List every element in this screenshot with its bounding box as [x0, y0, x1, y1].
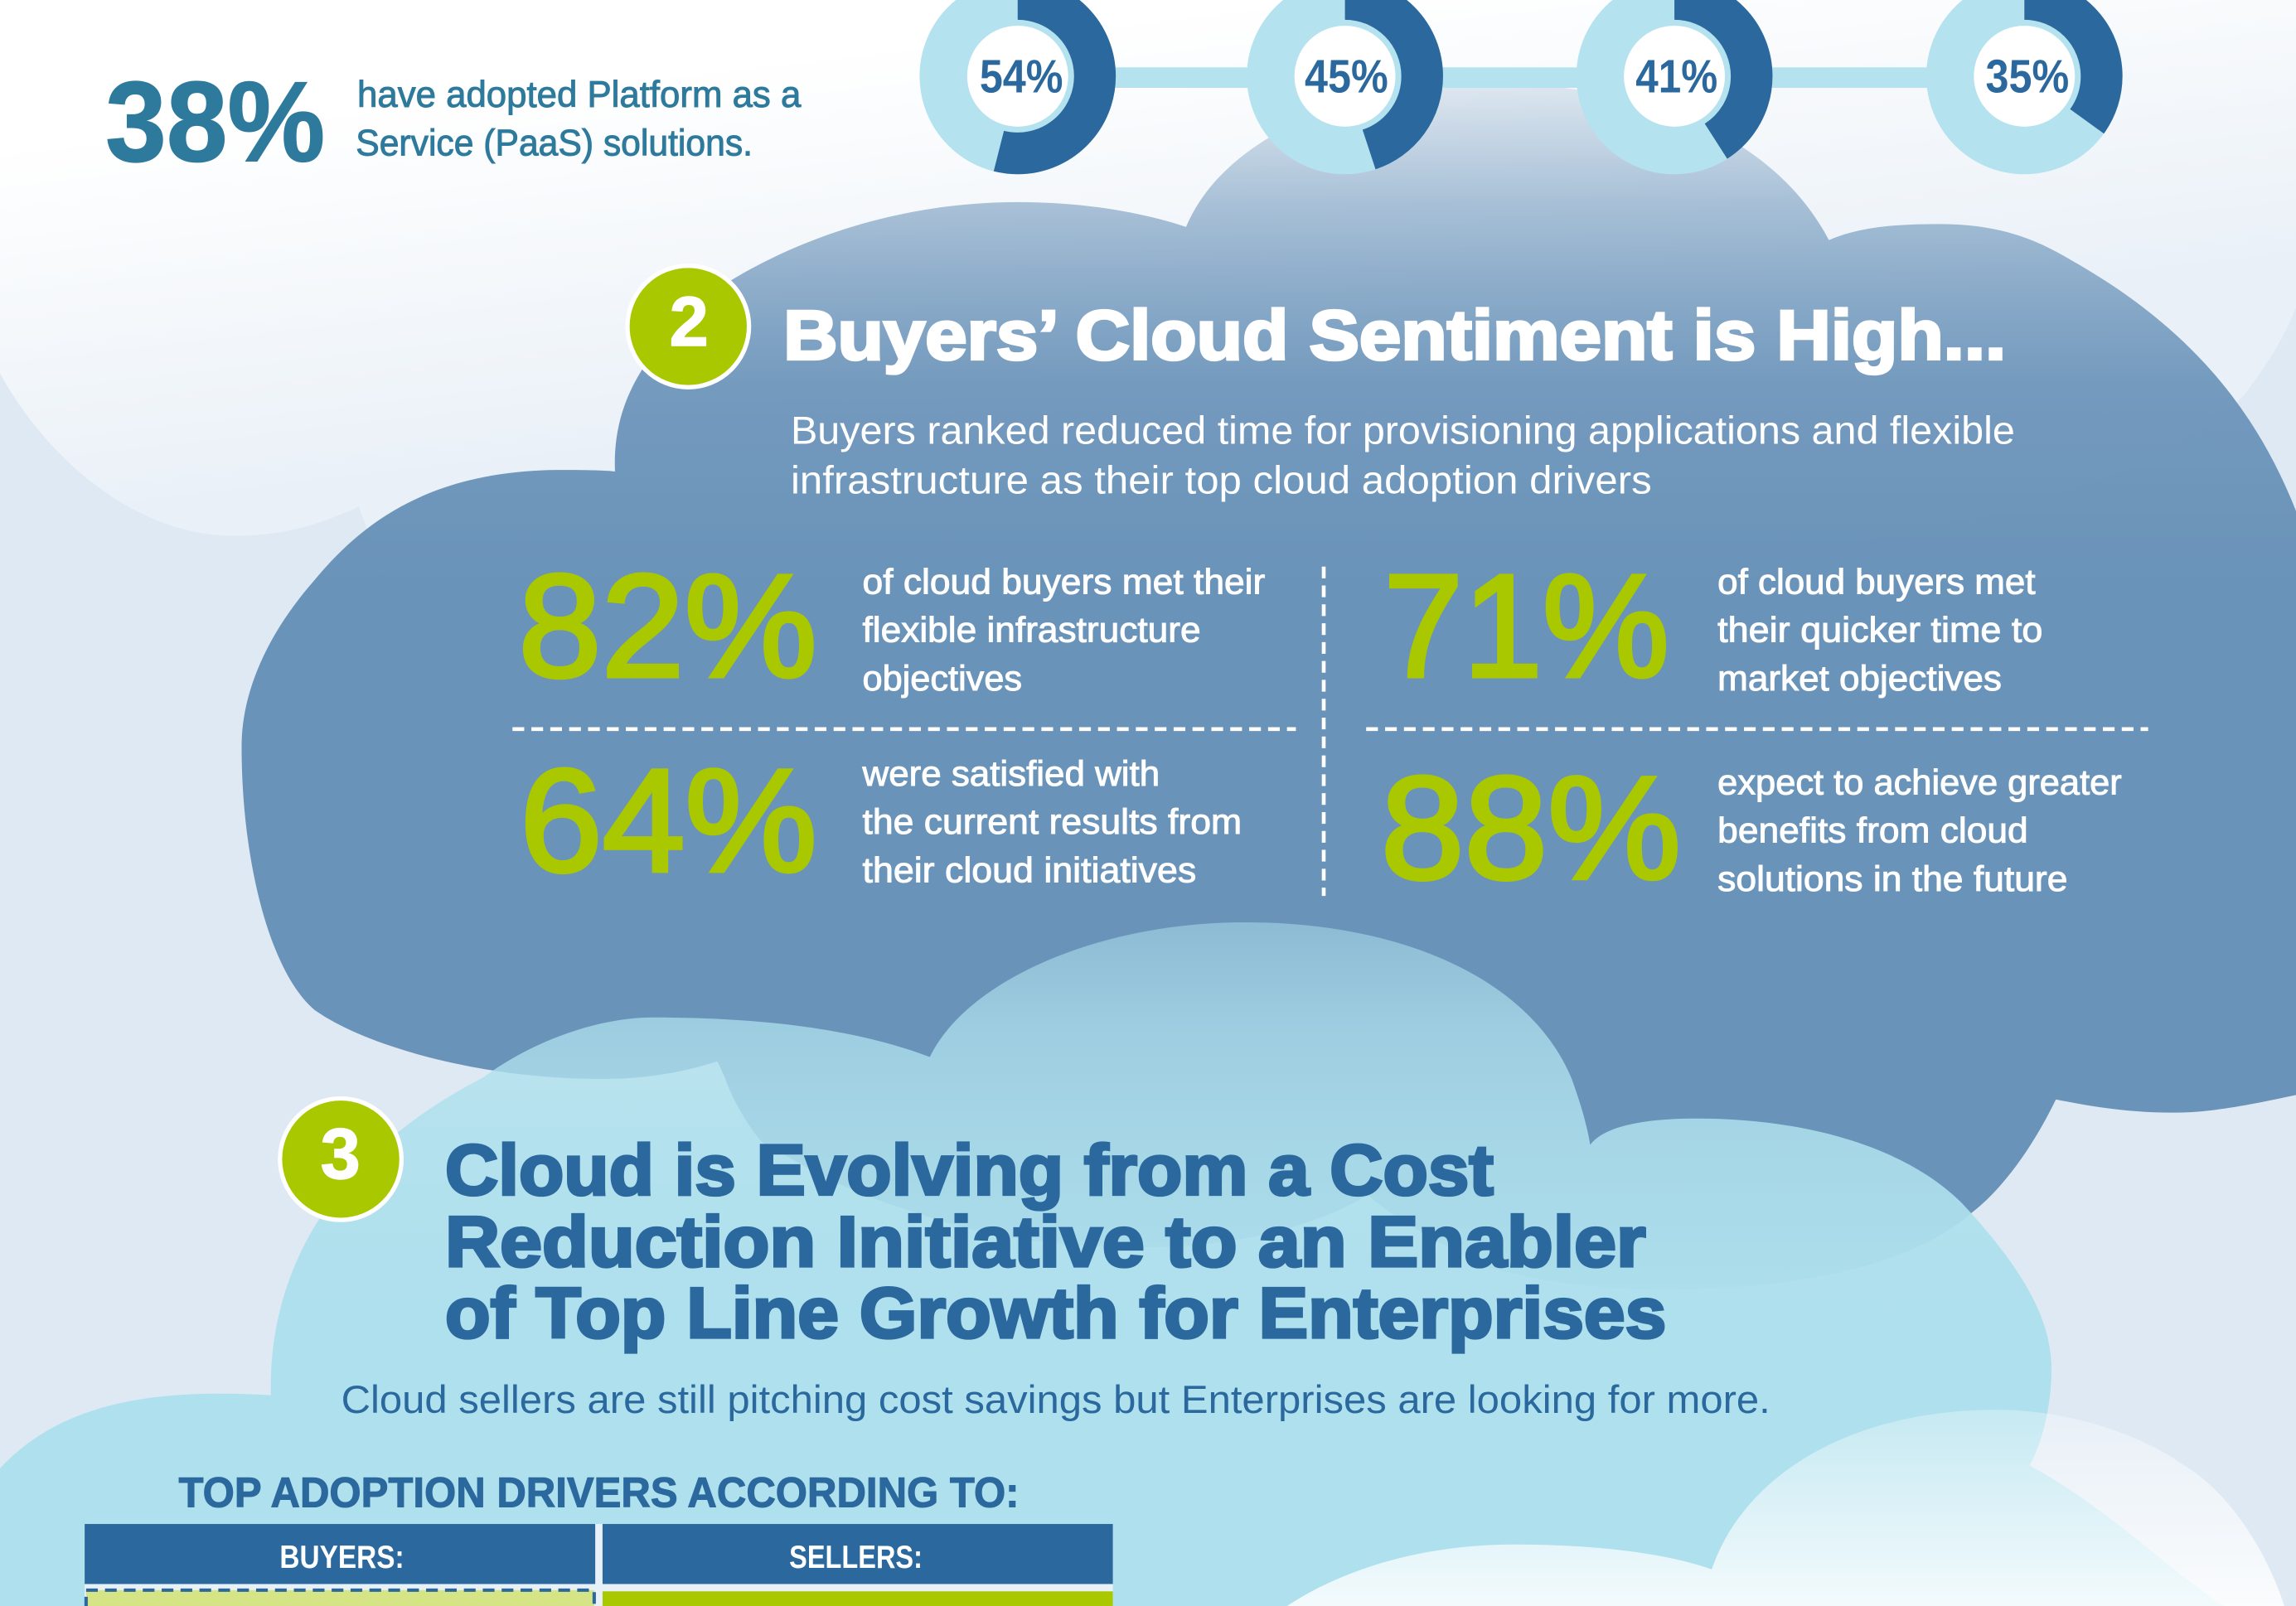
table header: buyers: [85, 1524, 595, 1584]
heading: section 3: of Top Line Growth for Enterprises: [445, 1274, 1666, 1353]
stat: 71 percent: market objectives: [1717, 659, 2002, 698]
table: adoption drivers: [85, 1524, 1113, 1606]
stat: 88 percent: solutions in the future: [1717, 859, 2067, 898]
badge: number 3: 3: [321, 1115, 361, 1194]
cloud: section 3 light blue: [0, 922, 2224, 1606]
stat: 71 percent: of cloud buyers met: [1717, 562, 2036, 601]
text: section 3 intro: Cloud sellers are still pitching cost savings but Enterprises are looking for more.: [341, 1378, 1770, 1422]
badge: number 3: [280, 1098, 401, 1220]
stat: 64 percent: 64%: [520, 739, 817, 902]
donut: 41 percent: 41%: [1635, 50, 1717, 102]
stat: 82 percent: objectives: [863, 659, 1022, 698]
donut: 45 percent: [1267, 0, 1422, 153]
badge: number 2: 2: [670, 282, 709, 360]
heading: section 3: Reduction Initiative to an Enabler: [445, 1202, 1646, 1282]
donut: 54 percent: 54%: [980, 50, 1063, 102]
table row: buyers first cell: [86, 1590, 594, 1606]
stat: 71 percent: their quicker time to: [1717, 611, 2042, 650]
donut: 54 percent: [941, 0, 1095, 153]
stat: 38 percent PaaS: [105, 58, 802, 186]
heading: section 3: Cloud is Evolving from a Cost: [445, 1131, 1494, 1211]
stat: 88 percent: 88%: [1381, 747, 1681, 910]
stat: 71 percent: 71%: [1383, 544, 1669, 708]
cloud: bottom white: [1287, 1410, 2284, 1606]
table row: sellers first cell: [603, 1591, 1113, 1606]
cloud: top white: [0, 0, 2296, 640]
donut: 35 percent: [1947, 0, 2101, 153]
stat: 82 percent: 82%: [518, 544, 817, 708]
stat: 71 percent: [1383, 544, 2042, 708]
stat: 64 percent: were satisfied with: [861, 754, 1160, 793]
stat: 38 percent PaaS: have adopted Platform as a: [357, 75, 802, 115]
heading: section 2: Buyers’ Cloud Sentiment is High...: [783, 296, 2006, 375]
stat: 82 percent: [518, 544, 1265, 708]
heading: section 3: [445, 1131, 1666, 1353]
table header: buyers: BUYERS:: [279, 1540, 404, 1575]
stat: 38 percent PaaS: 38%: [105, 58, 325, 186]
stat: 38 percent PaaS: Service (PaaS) solutions.: [356, 123, 753, 163]
text: section 2 intro: [791, 409, 2015, 502]
badge: number 2: [627, 266, 749, 387]
stat: 82 percent: flexible infrastructure: [863, 611, 1201, 650]
text: section 2 intro: Buyers ranked reduced time for provisioning applications and flexible: [791, 409, 2015, 452]
cloud: section 2 dark blue: [241, 84, 2296, 1289]
table header: sellers: SELLERS:: [789, 1540, 923, 1575]
table header: sellers: [603, 1524, 1113, 1584]
stat: 88 percent: benefits from cloud: [1717, 811, 2028, 850]
stat: 88 percent: expect to achieve greater: [1717, 762, 2122, 801]
donut connector: [1018, 67, 2023, 88]
stat: 64 percent: the current results from: [863, 802, 1242, 841]
stat: 64 percent: [520, 739, 1242, 902]
donut: 45 percent: 45%: [1305, 50, 1388, 102]
stat: 64 percent: their cloud initiatives: [863, 850, 1196, 889]
stat: 88 percent: [1381, 747, 2122, 910]
donut: 41 percent: [1597, 0, 1751, 153]
stat: 82 percent: of cloud buyers met their: [863, 562, 1265, 601]
table heading: TOP ADOPTION DRIVERS ACCORDING TO:: [179, 1469, 1020, 1517]
text: section 2 intro: infrastructure as their top cloud adoption drivers: [791, 458, 1652, 502]
donut: 35 percent: 35%: [1985, 50, 2069, 102]
